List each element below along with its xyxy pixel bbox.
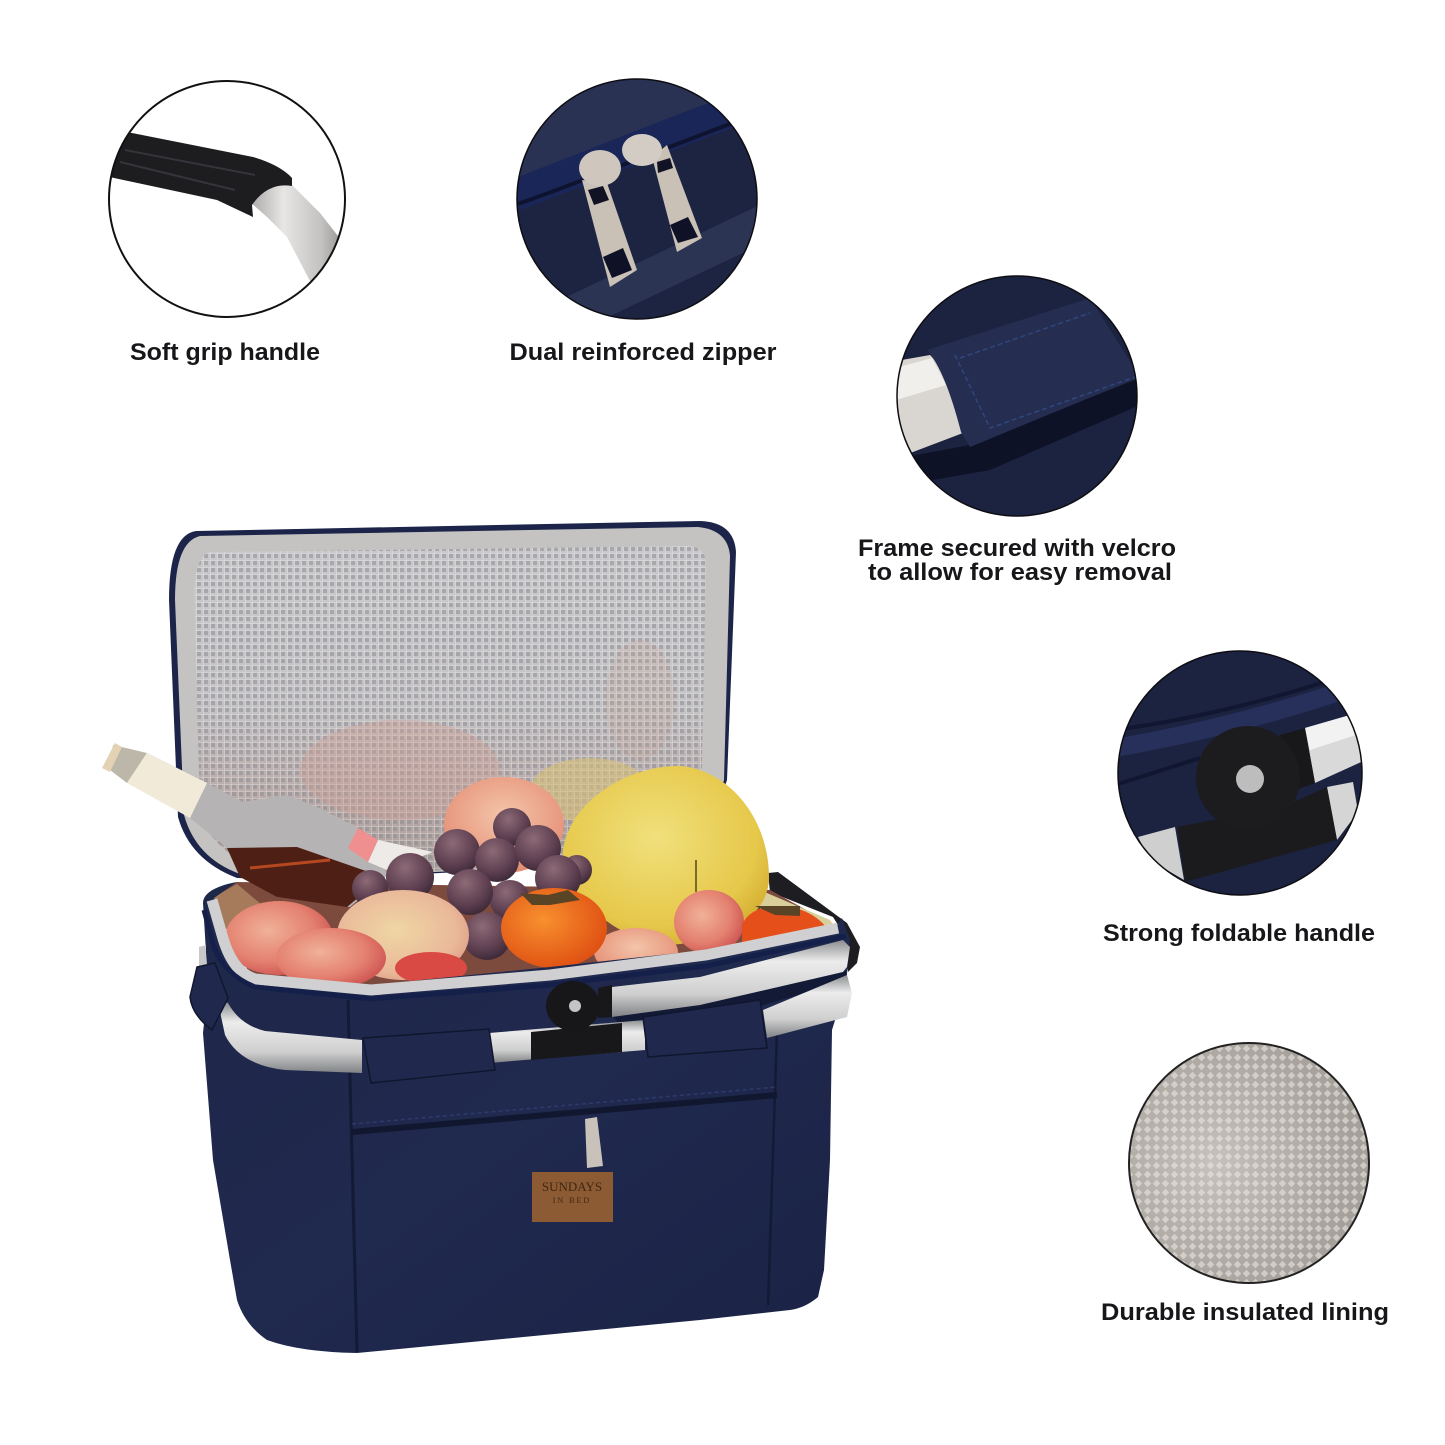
side panel seam right bbox=[768, 1030, 777, 1305]
apple back low bbox=[594, 928, 678, 976]
handle: upper right bar bbox=[612, 940, 850, 1017]
body: navy bag body bbox=[203, 882, 850, 1353]
caption: foldable handle: Strong foldable handle bbox=[1103, 920, 1375, 947]
zipper pulls bbox=[579, 134, 702, 287]
left end strap bbox=[190, 963, 228, 1030]
callout: soft grip handle bbox=[100, 81, 345, 366]
lid: open lid with foil lining bbox=[169, 521, 736, 880]
peach bbox=[444, 777, 564, 873]
caption: easy removal: to allow for easy removal bbox=[868, 559, 1172, 586]
handle: lower right bar bbox=[763, 975, 852, 1038]
handle: middle bar bbox=[489, 1020, 645, 1063]
apple big pale bbox=[337, 890, 469, 980]
handle: hinge bbox=[531, 981, 622, 1060]
leather brand tag: IN BED bbox=[553, 1196, 591, 1205]
caption: velcro frame: Frame secured with velcro bbox=[858, 535, 1176, 562]
caption: soft grip handle: Soft grip handle bbox=[130, 339, 320, 366]
callout: velcro frame bbox=[858, 276, 1176, 586]
caption: insulated lining: Durable insulated lining bbox=[1101, 1299, 1389, 1326]
foil rim bbox=[212, 900, 838, 990]
red apple right bbox=[674, 890, 744, 954]
product photo: cooler basket bbox=[102, 521, 860, 1353]
callout: foldable handle bbox=[1103, 651, 1375, 947]
callout: dual reinforced zipper bbox=[510, 70, 776, 366]
back handle bbox=[768, 872, 860, 972]
group: fruit and wine bbox=[102, 743, 830, 988]
handle: back hint bbox=[199, 945, 206, 975]
persimmon large bbox=[501, 888, 607, 968]
velcro strap right bbox=[643, 1000, 767, 1057]
grapes back bbox=[352, 808, 592, 960]
interior: bag opening bbox=[212, 882, 840, 995]
side panel seam left bbox=[348, 1000, 357, 1352]
apple left bbox=[225, 901, 333, 975]
icon: soft grip handle circle bbox=[100, 81, 345, 317]
pomelo bbox=[563, 766, 769, 945]
small red apple bbox=[395, 952, 467, 984]
velcro strap left bbox=[363, 1029, 495, 1083]
callout: insulated lining bbox=[1101, 1043, 1389, 1326]
wine bottle bbox=[102, 743, 433, 907]
icon: zipper circle bbox=[515, 70, 770, 320]
icon: velcro strap circle bbox=[890, 276, 1140, 516]
front pocket bbox=[352, 1087, 777, 1168]
persimmon right bbox=[742, 906, 830, 950]
apple front bbox=[276, 928, 386, 988]
icon: folding hinge circle bbox=[1115, 651, 1370, 895]
leather brand tag bbox=[532, 1172, 613, 1222]
handle: front left bar bbox=[219, 1002, 362, 1073]
handle: gap shadow bbox=[612, 970, 848, 1025]
leather brand tag: SUNDAYS bbox=[542, 1179, 602, 1194]
caption: dual zipper: Dual reinforced zipper bbox=[510, 339, 776, 366]
rim zipper line bbox=[204, 910, 846, 999]
zipper pull bbox=[585, 1117, 603, 1168]
icon: lining texture circle bbox=[1129, 1043, 1369, 1283]
